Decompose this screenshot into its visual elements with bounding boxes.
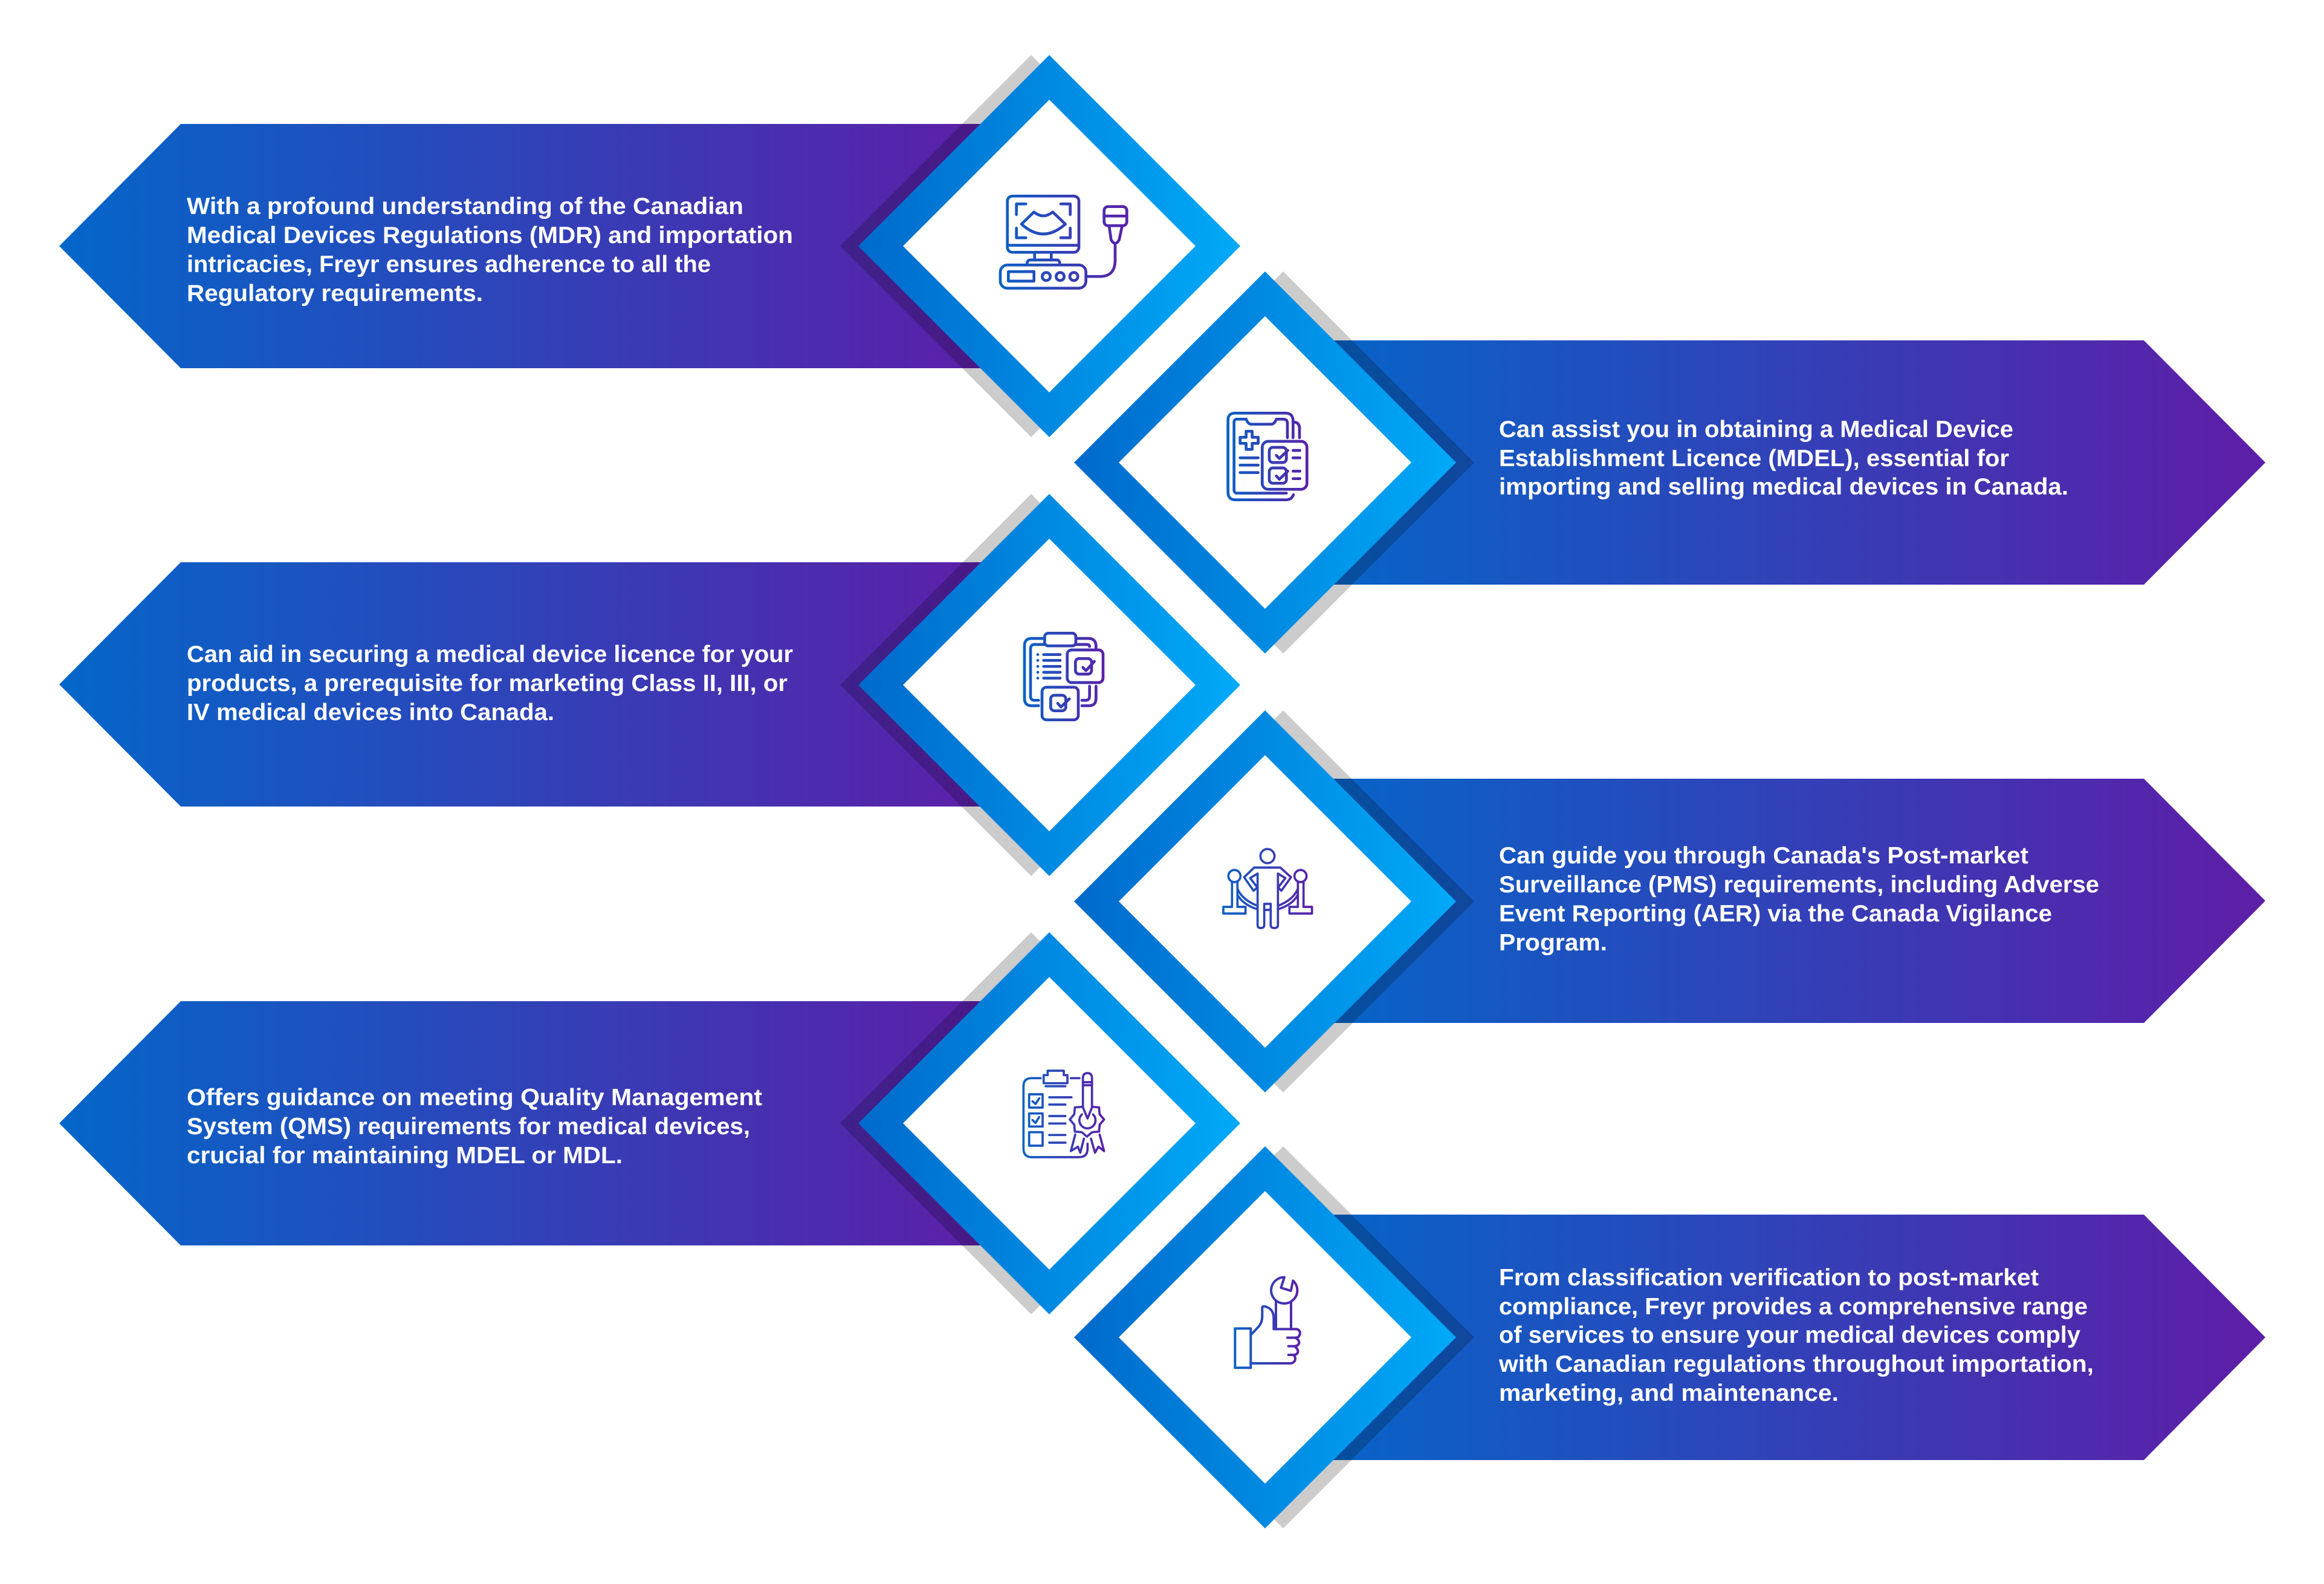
diamond shadow 5	[840, 932, 1222, 1314]
icon: person between stanchions	[1223, 849, 1312, 928]
text block 4	[1499, 843, 2099, 956]
arrow band 4	[1300, 779, 2265, 1023]
text block 1	[187, 193, 793, 307]
diamond centre 6	[1119, 1191, 1411, 1484]
text block 3	[187, 641, 793, 725]
text block 6	[1498, 1265, 2094, 1406]
text block 2: Establishment Licence (MDEL), essential for	[1499, 446, 2009, 472]
arrow band 3	[59, 562, 1015, 807]
text block 4: Can guide you through Canada's Post-market	[1499, 843, 2028, 869]
icon: clipboard with check cards	[1024, 633, 1103, 720]
icon: QMS checklist with rosette	[1023, 1071, 1104, 1157]
text block 1: With a profound understanding of the Canadian	[187, 193, 743, 219]
diamond frame 6	[1074, 1146, 1456, 1528]
arrow band 2	[1300, 340, 2265, 585]
text block 4: Program.	[1499, 930, 1607, 956]
text block 5: System (QMS) requirements for medical devices,	[187, 1114, 750, 1140]
panel: MDEL licence	[1074, 271, 2265, 654]
diamond frame 5	[858, 932, 1240, 1314]
text block 3: products, a prerequisite for marketing Class II, III, or	[187, 670, 788, 696]
diamond centre 4	[1119, 755, 1411, 1048]
text block 2: Can assist you in obtaining a Medical Device	[1499, 417, 2013, 443]
text block 2: importing and selling medical devices in Canada.	[1499, 474, 2068, 500]
diamond shadow 1	[840, 55, 1222, 437]
text block 3: IV medical devices into Canada.	[187, 699, 554, 725]
text block 1: Regulatory requirements.	[187, 281, 483, 307]
icon: thumbs-up with wrench	[1235, 1277, 1300, 1368]
diamond centre 5	[903, 977, 1196, 1270]
diamond shadow 4	[1092, 710, 1474, 1092]
panel: device licence	[59, 494, 1240, 876]
text block 6: From classification verification to post-market	[1499, 1265, 2039, 1291]
text block 2	[1499, 417, 2068, 500]
text block 6: compliance, Freyr provides a comprehensive range	[1499, 1294, 2088, 1320]
diamond frame 1	[858, 55, 1240, 437]
text block 1: intricacies, Freyr ensures adherence to all the	[187, 252, 711, 278]
diamond shadow 2	[1092, 271, 1474, 654]
text block 6: with Canadian regulations throughout importation,	[1498, 1351, 2094, 1377]
text block 5: crucial for maintaining MDEL or MDL.	[187, 1143, 623, 1169]
text block 5: Offers guidance on meeting Quality Management	[187, 1085, 762, 1111]
diamond shadow 6	[1092, 1146, 1474, 1528]
diamond frame 4	[1074, 710, 1456, 1092]
panel: MDR adherence	[59, 55, 1240, 437]
icon: ultrasound machine	[1000, 196, 1127, 288]
text block 6: of services to ensure your medical devices comply	[1499, 1322, 2080, 1348]
panel: post-market surveillance	[1074, 710, 2265, 1092]
icon: medical checklist tablet	[1228, 413, 1307, 500]
diamond frame 2	[1074, 271, 1456, 654]
diamond shadow 3	[840, 494, 1222, 876]
text block 3: Can aid in securing a medical device licence for your	[187, 641, 793, 667]
arrow band 5	[59, 1001, 1015, 1245]
text block 5	[187, 1085, 762, 1169]
arrow band 1	[59, 124, 1015, 368]
text block 1: Medical Devices Regulations (MDR) and importation	[187, 222, 793, 248]
diamond centre 3	[903, 539, 1196, 831]
text block 6: marketing, and maintenance.	[1499, 1380, 1839, 1406]
panel: comprehensive services	[1074, 1146, 2265, 1528]
diamond centre 2	[1119, 316, 1411, 609]
text block 4: Event Reporting (AER) via the Canada Vigilance	[1499, 901, 2052, 927]
diamond centre 1	[903, 100, 1196, 392]
diamond frame 3	[858, 494, 1240, 876]
arrow band 6	[1300, 1215, 2265, 1460]
panel: quality management	[59, 932, 1240, 1314]
text block 4: Surveillance (PMS) requirements, including Adverse	[1499, 872, 2099, 898]
